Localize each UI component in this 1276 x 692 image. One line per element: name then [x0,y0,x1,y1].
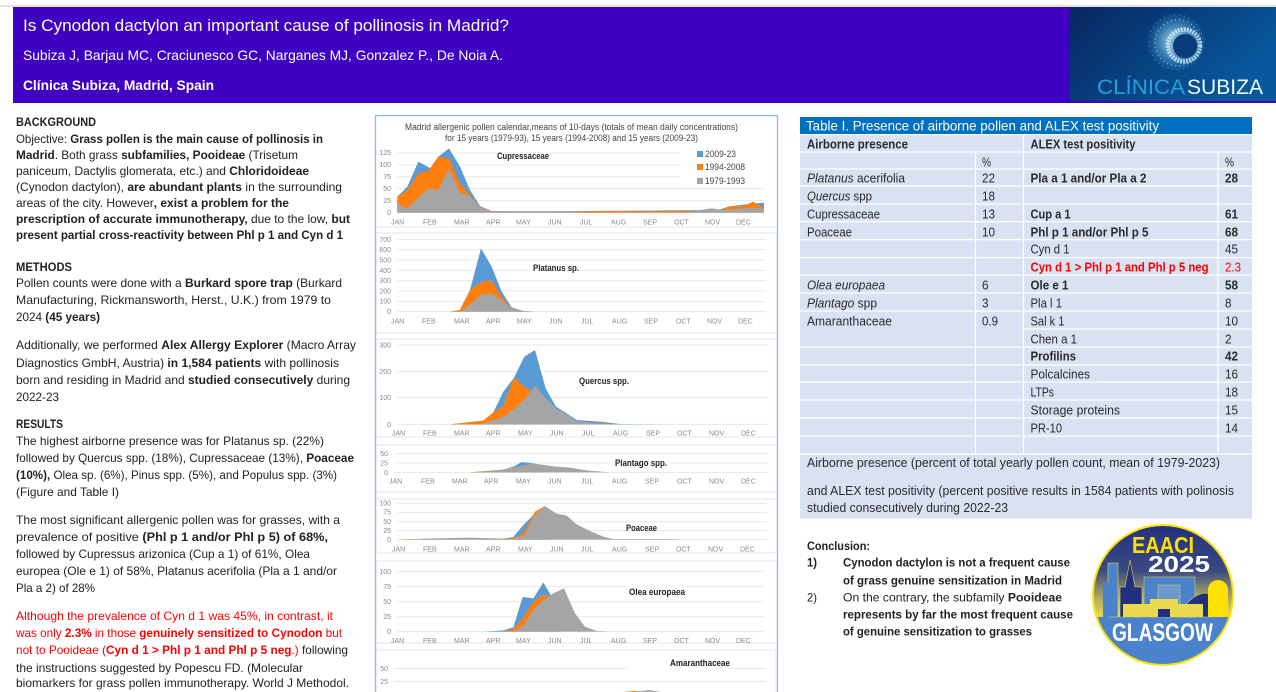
conclusion item 2: 2) [807,590,817,604]
x axis: FEB [422,318,436,326]
y axis: 100 [379,162,391,169]
y axis: 100 [379,395,391,402]
chart label: Olea europaea [629,587,686,597]
column: ALEX test positivity: 68 [1225,226,1238,240]
x axis: AUG [612,546,627,554]
column: airborne presence: Olea europaea [807,278,885,292]
results heading: RESULTS [16,417,63,431]
x axis: MAR [454,318,470,326]
y axis [379,237,391,316]
y axis: 100 [379,500,391,508]
column: ALEX test positivity: ALEX test positivity [1030,138,1136,152]
results text: prevalence of positive (Phl p 1 and/or Phl p 5) of 68%, [16,530,328,544]
affiliation: Clínica Subiza, Madrid, Spain [23,77,214,93]
x axis: MAR [454,638,470,645]
column: airborne presence: 3 [982,296,989,310]
conclusion item 2: On the contrary, the subfamily Pooideae [843,590,1062,604]
logo: Clinica Subiza [1069,7,1276,101]
y axis: 0 [387,309,391,316]
column: ALEX test positivity: Ole e 1 [1030,278,1069,292]
x axis: JAN [389,478,402,486]
x axis: MAY [516,478,531,486]
y axis: 50 [380,666,388,673]
x axis: MAY [517,318,532,326]
x axis: OCT [677,478,692,486]
methods text: Pollen counts were done with a Burkard spore trap (Burkard [16,276,342,290]
x axis [391,220,750,224]
x axis: MAY [516,638,531,645]
logo: Clinica Subiza: SUBIZA [1187,76,1263,99]
y axis: 75 [383,584,391,591]
methods text: born and residing in Madrid and studied consecutively during [16,373,350,387]
column: airborne presence: Platanus acerifolia [807,172,905,186]
conclusion [807,539,1073,638]
badge: EAACI 2025 Glasgow: EAACI [1132,532,1194,558]
background heading: BACKGROUND [16,115,96,129]
x axis: OCT [674,220,690,226]
x axis: OCT [676,546,692,554]
results text: followed by Quercus spp. (18%), Cupressaceae (13%), Poaceae [16,451,354,465]
chart label: Quercus spp. [579,376,629,386]
y axis: 0 [387,629,391,636]
y axis [380,666,388,684]
background text: present partial cross-reactivity between Phl p 1 and Cyn d 1 [16,228,343,242]
column: airborne presence: Airborne presence [807,138,908,152]
background text [16,132,350,242]
x axis: OCT [677,430,692,438]
x axis: APR [484,478,498,486]
background text: Madrid. Both grass subfamilies, Pooideae (Trisetum [16,148,298,162]
y axis: 25 [383,528,391,535]
x axis: NOV [707,318,722,326]
column: ALEX test positivity: 61 [1225,208,1238,222]
x axis: MAR [454,220,470,226]
legend: 1979-1993 [705,176,745,186]
panel: pollen calendar charts [376,116,778,692]
y axis: 50 [380,451,388,458]
chart label: Plantago spp. [615,458,667,468]
column: airborne presence: Plantago spp [807,296,877,310]
column: ALEX test positivity: Pla a 1 and/or Pla a 2 [1030,172,1147,186]
x axis: JUN [548,478,562,486]
column: airborne presence: Cupressaceae [807,208,880,222]
column: ALEX test positivity: Sal k 1 [1030,314,1065,328]
x axis: JUN [548,638,562,645]
results text [16,434,354,595]
column: ALEX test positivity: 2 [1225,332,1232,346]
x axis: JUL [582,430,595,438]
x axis [391,318,752,324]
column: ALEX test positivity: Pla l 1 [1030,296,1062,310]
column: ALEX test positivity: Cyn d 1 [1030,242,1070,256]
x axis: APR [486,546,500,554]
conclusion item 2: represents by far the most frequent cause [843,608,1073,622]
x axis: APR [486,220,500,226]
x axis: JUL [581,546,594,554]
column: airborne presence: 0.9 [982,314,998,328]
x axis: SEP [646,430,660,438]
y axis [379,342,391,429]
column: airborne presence: Quercus spp [807,190,872,204]
x axis: NOV [705,638,720,645]
column: ALEX test positivity: Chen a 1 [1030,332,1077,346]
legend: 1994-2008 [705,162,745,172]
column: ALEX test positivity: 18 [1225,386,1238,400]
title: Is Cynodon dactylon an important cause of pollinosis in Madrid? [23,16,509,35]
x axis: JUN [550,430,564,438]
y axis: 25 [380,460,388,468]
x axis: JAN [391,220,404,226]
chart: Platanus sp. [376,233,777,333]
y axis: 700 [379,237,391,244]
methods text: Manufacturing, Rickmansworth, Herst., U.K.) from 1979 to [16,293,331,307]
y axis: 600 [379,247,391,254]
table footnote: Airborne presence (percent of total yearly pollen count, mean of 1979-2023) [807,456,1220,470]
y axis [379,150,391,217]
column: ALEX test positivity: PR-10 [1030,422,1062,436]
x axis: DEC [740,546,755,554]
x axis: DEC [741,478,756,486]
x axis: JAN [392,546,405,554]
methods text: 2022-23 [16,390,59,404]
column: ALEX test positivity: 15 [1225,404,1238,418]
y axis: 100 [379,298,391,306]
table footnote: studied consecutively during 2022-23 [807,501,1008,515]
x axis: OCT [674,638,690,645]
column: ALEX test positivity: % [1225,156,1234,170]
x axis [391,638,750,643]
x axis: APR [486,638,500,645]
column: ALEX test positivity: Storage proteins [1030,404,1120,418]
chart label: Poaceae [626,523,657,533]
results text: The most significant allergenic pollen was for grasses, with a [16,513,340,527]
y axis: 300 [379,278,391,285]
table footnote [807,456,1234,515]
x axis: JUN [549,318,563,326]
column: ALEX test positivity: 42 [1225,350,1238,364]
column: airborne presence: 18 [982,190,995,204]
x axis: OCT [676,318,692,326]
column: ALEX test positivity: 14 [1225,422,1238,436]
red key finding: biomarkers for grass pollen immunotherapy. World J Methodol. [16,676,349,690]
column: ALEX test positivity: 45 [1225,242,1238,256]
x axis: NOV [709,478,724,486]
table heading: Table I. Presence of airborne pollen and ALEX test positivity [806,118,1159,134]
y axis: 0 [387,422,391,429]
legend: 2009-23 [705,149,736,159]
y axis [380,451,388,475]
x axis: SEP [643,220,657,226]
x axis: MAR [454,546,470,554]
results text: europea (Ole e 1) of 58%, Platanus acerifolia (Pla a 1 and/or [16,564,337,578]
column: airborne presence: Amaranthaceae [807,314,892,328]
x axis [389,478,756,484]
skyline [1103,560,1228,617]
y axis: 0 [387,537,391,544]
column: ALEX test positivity: 58 [1225,278,1238,292]
chart label: Cupressaceae [497,151,549,161]
column: airborne presence [807,138,998,328]
column: ALEX test positivity: Polcalcines [1030,368,1090,382]
x axis: SEP [645,478,659,486]
legend [697,149,745,186]
x axis: JUL [580,638,593,645]
results text: Pla a 2) of 28% [16,581,95,595]
y axis: 200 [379,369,391,376]
column: ALEX test positivity: Cyn d 1 > Phl p 1 and Phl p 5 neg [1030,260,1208,274]
x axis: NOV [708,546,724,554]
y axis: 500 [379,258,391,264]
x axis: SEP [645,546,659,554]
chart: Amaranthaceae [376,650,776,692]
red key finding: was only 2.3% in those genuinely sensitized to Cynodon but [15,626,343,640]
conclusion item 1: 1) [807,556,817,570]
x axis: FEB [423,430,437,438]
chart: Cupressaceae [376,148,777,227]
x axis: MAR [452,478,468,486]
red key finding: Although the prevalence of Cyn d 1 was 45%, in contrast, it [16,609,334,623]
x axis: DEC [736,220,751,226]
y axis: 0 [384,470,388,477]
x axis: AUG [611,638,626,645]
badge: EAACI 2025 Glasgow: GLASGOW [1112,619,1213,647]
y axis: 50 [383,599,391,606]
y axis: 200 [379,288,391,296]
conclusion item 1: of grass genuine sensitization in Madrid [843,574,1062,588]
background text: (Cynodon dactylon), are abundant plants in the surrounding [16,180,342,194]
x axis: JAN [391,638,404,645]
chart label: Amaranthaceae [670,658,730,668]
x axis: JUL [580,220,593,226]
methods text: Additionally, we performed Alex Allergy Explorer (Macro Array [16,338,356,352]
conclusion item 1: Cynodon dactylon is not a frequent cause [843,556,1070,570]
x axis: MAY [518,546,533,554]
authors: Subiza J, Barjau MC, Craciunesco GC, Narganes MJ, Gonzalez P., De Noia A. [23,47,503,63]
red key finding: the instructions suggested by Popescu FD. (Molecular [16,661,303,675]
x axis: JUN [550,546,564,554]
chart: Plantago spp. [376,445,777,492]
table: presence of airborne pollen and ALEX test positivity [800,117,1252,518]
chart title: Madrid allergenic pollen calendar,means of 10-days (totals of mean daily concentrations) [405,122,738,132]
conclusion: Conclusion: [807,539,870,553]
results text: followed by Cupressus arizonica (Cup a 1) of 61%, Olea [16,547,310,561]
x axis: MAR [454,430,470,438]
chart title [405,122,738,143]
column: ALEX test positivity: 28 [1225,172,1238,186]
x axis: JUL [581,478,594,486]
x axis: SEP [644,318,658,326]
red key finding: not to Pooideae (Cyn d 1 > Phl p 1 and Phl p 5 neg.) following [16,643,348,657]
x axis: FEB [421,478,435,486]
x axis: JAN [391,318,404,326]
x axis: MAY [516,220,531,226]
column: ALEX test positivity: 2.3 [1225,260,1241,274]
x axis: DEC [741,430,756,438]
x axis: DEC [738,318,753,326]
x axis: FEB [423,638,437,645]
chart label: Platanus sp. [533,263,579,273]
background text: paniceum, Dactylis glomerata, etc.) and Chloridoideae [16,164,309,178]
column: airborne presence: 6 [982,278,989,292]
y axis: 300 [379,342,391,350]
table footnote: and ALEX test positivity (percent positive results in 1584 patients with polinosis [807,484,1234,498]
y axis: 75 [383,510,391,516]
methods text: 2024 (45 years) [16,310,100,324]
y axis: 125 [379,150,391,157]
column: airborne presence: 13 [982,208,995,222]
results text: (Figure and Table I) [16,485,119,499]
column: ALEX test positivity: LTPs [1030,386,1054,400]
x axis: JUN [548,220,562,226]
x axis [392,430,756,436]
x axis: AUG [612,318,627,326]
x axis: FEB [423,546,437,554]
red key finding [15,609,349,690]
chart: Poaceae [376,499,777,554]
column: airborne presence: % [982,156,991,170]
methods text: Diagnostics GmbH, Austria) in 1,584 patients with pollinosis [16,356,339,370]
x axis [392,546,754,552]
y axis: 50 [383,186,391,193]
y axis: 50 [383,519,391,526]
logo: Clinica Subiza: CLÍNICA [1097,76,1185,99]
y axis: 0 [387,210,391,217]
chart: Quercus spp. [376,339,777,438]
x axis: SEP [643,638,657,645]
column: ALEX test positivity: 8 [1225,296,1232,310]
chart: Olea europaea [376,561,777,648]
x axis: AUG [612,478,627,486]
x axis: JUL [581,318,594,326]
conclusion item 2: of genuine sensitization to grasses [843,624,1032,638]
x axis: AUG [613,430,628,438]
y axis: 25 [383,198,391,205]
methods text [16,276,356,404]
header band [0,6,1276,103]
x axis: NOV [705,220,720,226]
column: ALEX test positivity: Cup a 1 [1030,208,1071,222]
column: airborne presence: 22 [982,172,995,186]
badge: EAACI 2025 Glasgow [1090,524,1236,667]
background text: Objective: Grass pollen is the main cause of pollinosis in [16,132,323,146]
column: airborne presence: Poaceae [807,226,852,240]
y axis: 75 [383,174,391,181]
column: ALEX test positivity: 16 [1225,368,1238,382]
y axis [379,569,391,636]
conclusion item 2 [807,590,1073,638]
x axis: JAN [392,430,405,438]
conclusion item 1 [807,556,1070,588]
y axis [379,500,391,544]
y axis: 400 [379,268,391,275]
column: ALEX test positivity: Phl p 1 and/or Phl p 5 [1030,226,1149,240]
x axis: APR [486,318,500,326]
results text: (10%), Olea sp. (6%), Pinus spp. (5%), and Populus spp. (3%) [16,468,337,482]
x axis: AUG [611,220,626,226]
y axis: 25 [383,614,391,621]
column: ALEX test positivity [1030,138,1241,436]
panel: background, methods and results text [15,115,356,690]
column: ALEX test positivity: Profilins [1030,350,1076,364]
x axis: DEC [736,638,751,645]
y axis: 100 [379,569,391,576]
x axis: APR [486,430,500,438]
x axis: MAY [518,430,533,438]
background text: areas of the city. However, exist a problem for the [16,196,289,210]
badge: EAACI 2025 Glasgow: 2025 [1148,551,1210,577]
chart title: for 15 years (1979-93), 15 years (1994-2008) and 15 years (2009-23) [445,133,698,143]
results text: The highest airborne presence was for Platanus sp. (22%) [16,434,324,448]
y axis: 25 [380,679,388,686]
x axis: FEB [423,220,437,226]
column: ALEX test positivity: 10 [1225,314,1238,328]
column: airborne presence: 10 [982,226,995,240]
x axis: NOV [709,430,724,438]
background text: prescription of accurate immunotherapy, due to the low, but [16,212,350,226]
methods heading: METHODS [16,260,72,274]
